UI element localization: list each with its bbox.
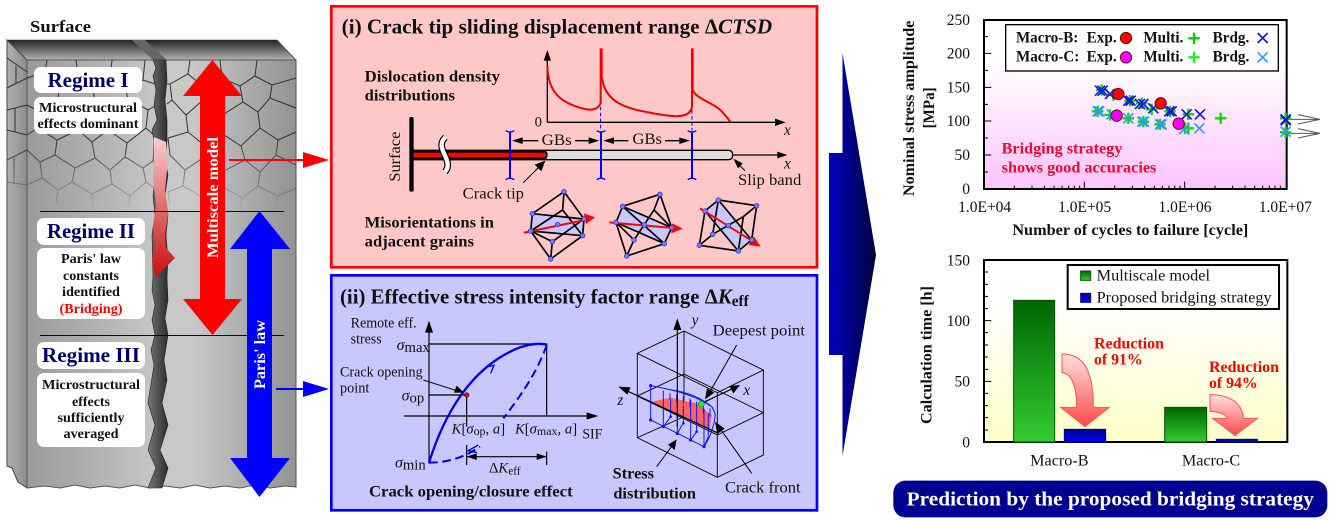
regime divider lines <box>40 212 284 336</box>
y axis labels: 150 <box>947 79 970 96</box>
text: Regime I description <box>34 97 142 134</box>
heading: Surface: Surface <box>30 17 91 36</box>
label: Crack tip: Crack tip <box>463 185 524 202</box>
callout: reduction of 91%: of 91% <box>1094 352 1143 369</box>
chart: crack opening/closure hysteresis: op <box>474 424 486 438</box>
diagram labels: y <box>690 312 699 329</box>
label: Slip band <box>733 159 801 189</box>
text: Regime II description <box>37 248 145 319</box>
text: Regime I description: Microstructural <box>39 101 137 116</box>
panel ii: effective stress intensity factor range <box>331 275 817 510</box>
legend: Exp. <box>1087 49 1117 66</box>
diagram labels: z <box>616 392 623 409</box>
y axis labels: 0 <box>962 434 970 451</box>
legend: Multi. <box>1143 30 1183 47</box>
run-out arrows <box>1286 115 1320 138</box>
wireframe box <box>637 331 763 477</box>
chart: crack opening/closure hysteresis: min <box>403 457 426 473</box>
panel background <box>331 6 817 267</box>
arrow: Macro-C reduction <box>1210 395 1257 436</box>
callout: bridging strategy accuracy: Bridging strategy <box>1002 140 1123 157</box>
legend: Macro-C: <box>1016 49 1079 66</box>
callout: reduction of 94%: of 94% <box>1209 375 1258 392</box>
chart: calculation time bar chart <box>893 252 1327 517</box>
heading: panel i title: (i) Crack tip sliding displacement range ΔCTSD <box>342 14 772 38</box>
main crack <box>148 60 168 488</box>
label: Multiscale model: Multiscale model <box>205 136 222 258</box>
panel background <box>331 275 817 510</box>
legend: Exp. <box>1087 30 1117 47</box>
y axis title <box>901 20 938 196</box>
axis labels: Remote eff. <box>351 315 417 331</box>
chart: crack opening/closure hysteresis: σ <box>397 337 406 354</box>
x axis labels: 1.0E+07 <box>1259 199 1312 216</box>
icon: misoriented crystal grains <box>524 189 761 261</box>
x axis labels: Macro-B <box>1030 452 1088 469</box>
x axis labels: 1.0E+05 <box>1058 199 1111 216</box>
banner: prediction by the proposed bridging strategy <box>893 481 1327 517</box>
x axis labels: 1.0E+04 <box>958 199 1011 216</box>
axis labels <box>340 315 602 442</box>
chart: dislocation density curve: 0 <box>535 115 542 131</box>
data: experimental circles <box>1111 88 1184 129</box>
chart: crack opening/closure hysteresis: , <box>486 421 493 437</box>
label: Regime I: Regime I <box>48 68 128 92</box>
data: bridging light blue x markers <box>1093 106 1291 137</box>
diagram labels: Crack front <box>725 479 801 496</box>
x axis labels: Macro-C <box>1182 452 1240 469</box>
slip band and crack diagram: x <box>783 155 791 172</box>
callout: bridging strategy accuracy: shows good accuracies <box>1002 159 1156 176</box>
text: Regime III description: effects <box>72 395 111 410</box>
y axis labels: 50 <box>955 374 970 391</box>
bar: Macro-C bridging <box>1216 439 1257 442</box>
callout: reduction of 91%: Reduction <box>1094 336 1164 353</box>
crack on top face <box>132 40 167 60</box>
chart: crack opening/closure hysteresis: K[σ <box>452 421 474 437</box>
callout: bridging strategy accuracy <box>1002 140 1156 176</box>
y axis labels <box>947 12 970 198</box>
y axis labels: 250 <box>947 12 970 29</box>
diagram labels <box>613 312 806 502</box>
text: Regime II description: (Bridging) <box>60 302 123 317</box>
label: Paris' law: Paris' law <box>252 320 269 389</box>
axis labels: point <box>340 381 369 397</box>
axis labels: SIF <box>582 426 602 442</box>
chart: crack opening/closure hysteresis <box>340 315 602 501</box>
text: Regime III description: Microstructural <box>42 378 140 393</box>
icon: grain 2 <box>609 192 683 258</box>
arrow: Paris' law to panel ii <box>276 381 329 397</box>
panel: specimen block with fatigue regimes <box>7 17 329 497</box>
axis labels: stress <box>351 331 382 347</box>
chart: crack opening/closure hysteresis: a] <box>565 421 577 437</box>
chart: crack opening/closure hysteresis: K[σ <box>515 421 537 437</box>
leader arrows <box>657 345 752 473</box>
banner: prediction by the proposed bridging strategy: Prediction by the proposed bridging strategy <box>907 489 1314 511</box>
text: Regime II description: constants <box>63 269 120 284</box>
legend <box>1006 25 1278 71</box>
panel i: crack tip sliding displacement range <box>331 6 817 267</box>
x axis labels: 1.0E+06 <box>1158 199 1212 216</box>
heading: panel ii title: eff <box>732 293 750 310</box>
deepest point marker <box>698 401 704 407</box>
chart: dislocation density curve <box>535 48 791 139</box>
arrow: Macro-B reduction <box>1061 354 1109 427</box>
polycrystalline grain network <box>7 58 296 210</box>
diagram labels: Deepest point <box>713 323 806 340</box>
label: Regime I <box>34 67 142 93</box>
y axis labels: 100 <box>947 113 970 130</box>
y axis labels: 100 <box>947 313 970 330</box>
axis ticks <box>984 20 1280 189</box>
legend: Brdg. <box>1213 30 1249 47</box>
slip band and crack diagram: GBs <box>632 131 662 148</box>
diagram labels: x <box>742 382 750 399</box>
crack surface <box>652 398 712 429</box>
y axis title: Nominal stress amplitude <box>901 20 918 196</box>
axis ticks <box>984 260 991 430</box>
stress vector arrow tips <box>649 384 706 448</box>
y axis labels: 50 <box>955 147 970 164</box>
specimen left side face <box>7 40 27 488</box>
arrow: Paris' law range <box>230 211 290 497</box>
text: Regime II description: identified <box>62 285 120 300</box>
chart: crack opening/closure hysteresis: σ <box>402 388 411 405</box>
chart: crack opening/closure hysteresis: eff <box>508 465 521 477</box>
y, z, x axes <box>627 328 732 433</box>
arrow: large navy block arrow to results <box>829 53 876 456</box>
chart: crack opening/closure hysteresis: , <box>558 421 565 437</box>
heading: panel ii title: (ii) Effective stress intensity factor range ΔK <box>340 284 732 308</box>
chart: crack opening/closure hysteresis: max <box>405 340 430 356</box>
text: Regime III description <box>37 373 145 447</box>
caption: Crack opening/closure effect: Crack opening/closure effect <box>369 484 574 501</box>
callout: reduction of 94%: Reduction <box>1209 359 1279 376</box>
diagram labels: distribution <box>613 485 696 502</box>
chart: crack opening/closure hysteresis: op <box>410 391 424 407</box>
legend: Multiscale model <box>1097 268 1210 285</box>
slip band and crack diagram: GBs <box>542 132 572 149</box>
specimen front face <box>27 60 296 488</box>
label: dislocation density distributions: distributions <box>365 88 455 105</box>
label: Regime II: Regime II <box>47 219 135 243</box>
label: misorientations in adjacent grains: Misorientations in <box>365 214 495 231</box>
text: Regime II description: Paris' law <box>61 252 122 267</box>
slip band and crack diagram: Surface <box>387 131 404 182</box>
y axis labels: 0 <box>962 181 970 198</box>
stress vectors <box>651 386 715 447</box>
callout: reduction of 94% <box>1209 359 1279 392</box>
x axis title: Number of cycles to failure [cycle] <box>1012 222 1248 239</box>
text: Regime I description: effects dominant <box>38 117 139 132</box>
y axis title: Calculation time [h] <box>918 286 935 424</box>
chart: crack opening/closure hysteresis: ΔK <box>489 460 508 476</box>
legend <box>1068 265 1279 309</box>
label: Crack tip <box>463 161 545 202</box>
y axis labels: 200 <box>947 46 970 63</box>
chart: crack opening/closure hysteresis: σ <box>395 454 404 471</box>
crack: red grown region <box>152 137 175 277</box>
plot area <box>984 20 1287 189</box>
specimen top face <box>7 40 296 60</box>
chart: dislocation density curve: x <box>783 122 791 139</box>
chart: crack opening/closure hysteresis: max <box>537 424 558 438</box>
data: bridging navy x markers <box>1095 86 1291 125</box>
legend: Brdg. <box>1213 49 1249 66</box>
label: dislocation density distributions <box>365 69 500 105</box>
chart: crack opening/closure hysteresis: a] <box>493 421 505 437</box>
arrow: multiscale model range <box>183 60 242 335</box>
y axis labels <box>947 252 970 451</box>
data: multiscale green plus markers <box>1092 84 1291 138</box>
bar: Macro-B multiscale <box>1014 300 1055 442</box>
y axis labels: 150 <box>947 252 970 269</box>
icon: grain 1 <box>524 189 595 261</box>
label: Regime III: Regime III <box>42 343 140 367</box>
label: dislocation density distributions: Dislocation density <box>365 69 500 86</box>
legend: Macro-B: <box>1016 30 1078 47</box>
icon: grain 3 <box>697 198 761 253</box>
slip band and crack diagram <box>387 117 791 192</box>
legend: Proposed bridging strategy <box>1097 290 1272 307</box>
x axis labels <box>958 199 1312 216</box>
diagram: 3D crack stress distribution <box>613 312 806 502</box>
label: misorientations in adjacent grains <box>365 214 495 251</box>
text: Regime III description: sufficiently <box>58 411 124 426</box>
callout: reduction of 91% <box>1094 336 1164 369</box>
x axis labels <box>1030 452 1240 469</box>
crack opening point <box>464 393 469 397</box>
bar: Macro-C multiscale <box>1165 407 1207 442</box>
label: Slip band: Slip band <box>738 172 801 189</box>
label: misorientations in adjacent grains: adjacent grains <box>365 234 474 251</box>
chart: S-N accuracy scatter plot <box>901 12 1320 239</box>
text: Regime III description: averaged <box>64 427 119 442</box>
axis labels: Crack opening <box>340 365 423 381</box>
bar: Macro-B bridging <box>1064 429 1106 442</box>
y axis title: [MPa] <box>921 87 938 128</box>
plot area <box>984 260 1287 442</box>
axes and construction lines <box>404 328 592 465</box>
arrow: multiscale to panel i <box>229 152 329 168</box>
diagram labels: Stress <box>613 465 654 482</box>
legend: Multi. <box>1143 49 1183 66</box>
hysteresis curve <box>429 344 547 463</box>
